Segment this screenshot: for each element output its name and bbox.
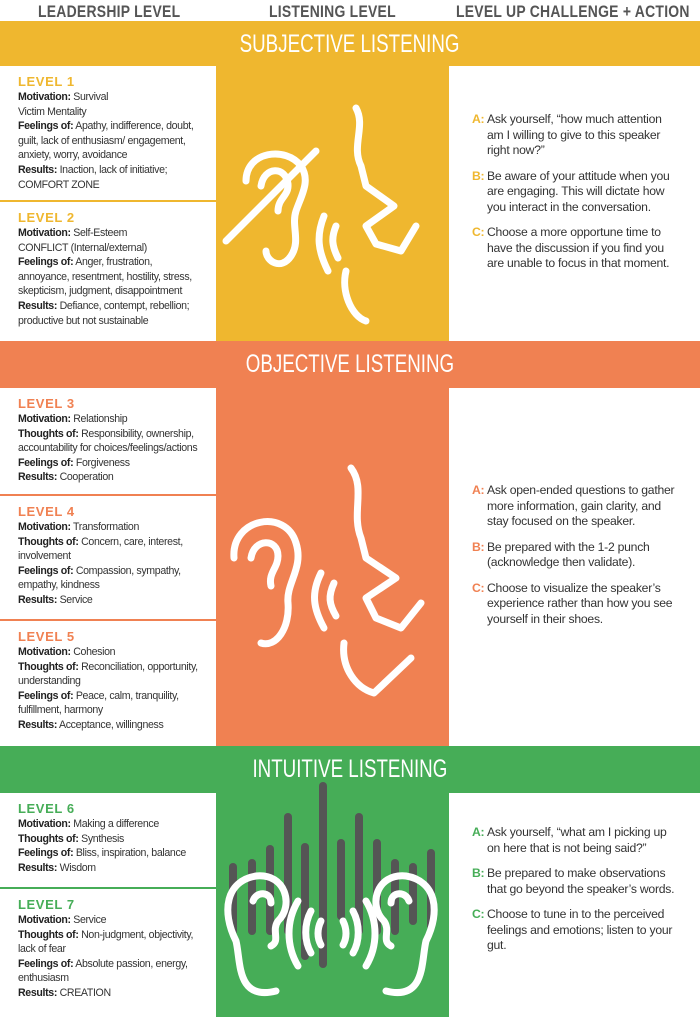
- level 6: Motivation: Making a difference: [18, 818, 159, 830]
- panel: objective listening: [0, 341, 700, 746]
- level 6: Results: Wisdom: [18, 862, 96, 874]
- level 3: Motivation: Relationship: [18, 413, 127, 425]
- actions: intuitive: A:: [472, 825, 484, 839]
- level 3: Results: Cooperation: [18, 471, 113, 483]
- actions: objective: C:: [472, 580, 484, 594]
- column heading: leadership level: LEADERSHIP LEVEL: [38, 2, 180, 21]
- panel: intuitive listening: [0, 746, 700, 1017]
- actions: intuitive: C:: [472, 907, 484, 921]
- actions: objective: B:: [472, 540, 484, 554]
- level 2: LEVEL 2: [18, 210, 75, 225]
- level 5: Motivation: Cohesion: [18, 646, 115, 658]
- level 7: Thoughts of: Non-judgment, objectivity, lack of fear: [18, 929, 193, 955]
- panel: subjective listening: [0, 21, 700, 341]
- level 3: LEVEL 3: [18, 396, 75, 411]
- level 5: LEVEL 5: [18, 629, 75, 644]
- heading: subjective listening: SUBJECTIVE LISTENING: [240, 30, 460, 58]
- level 6: Thoughts of: Synthesis: [18, 833, 124, 845]
- level 3: [0, 388, 216, 495]
- level 7: [0, 889, 216, 1017]
- level 1: LEVEL 1: [18, 74, 75, 89]
- level 4: LEVEL 4: [18, 504, 75, 519]
- actions: subjective: Be aware of your attitude when you are engaging. This will dictate how you interact in the conversation.: [487, 168, 670, 214]
- actions: subjective: [472, 112, 670, 270]
- actions: intuitive: Be prepared to make observations that go beyond the speaker’s words.: [487, 866, 674, 896]
- level 5: Results: Acceptance, willingness: [18, 719, 163, 731]
- level 2: [0, 202, 216, 341]
- level 6: Feelings of: Bliss, inspiration, balance: [18, 847, 186, 859]
- level 4: Results: Service: [18, 594, 92, 606]
- actions: objective: A:: [472, 483, 484, 497]
- icon: two ears with sound wave bars: [224, 782, 438, 996]
- icon: ear and speaking face: [230, 464, 424, 696]
- level 3: Feelings of: Forgiveness: [18, 457, 130, 469]
- level 7: Feelings of: Absolute passion, energy, enthusiasm: [18, 958, 188, 984]
- actions: intuitive: Choose to tune in to the perceived feelings and emotions; listen to your gut.: [487, 907, 672, 952]
- actions: objective: Ask open-ended questions to gather more information, gain clarity, and stay focused on the speaker.: [487, 483, 674, 528]
- column heading: listening level: LISTENING LEVEL: [269, 2, 396, 21]
- level 6: LEVEL 6: [18, 801, 75, 816]
- heading: intuitive listening: INTUITIVE LISTENING: [253, 755, 447, 783]
- level 1: Motivation: Survival: [18, 91, 108, 103]
- level 1: Feelings of: Apathy, indifference, doubt, guilt, lack of enthusiasm/ engagement, anxiety, worry, avoidance: [18, 120, 193, 161]
- actions: subjective: Choose a more opportune time to have the discussion if you find you are unable to focus in that moment.: [487, 225, 669, 270]
- level 4: Feelings of: Compassion, sympathy, empathy, kindness: [18, 565, 181, 591]
- actions: objective: Be prepared with the 1-2 punch (acknowledge then validate).: [487, 540, 650, 569]
- column heading: level up challenge: LEVEL UP CHALLENGE + ACTION: [456, 2, 690, 21]
- level 6: [0, 793, 216, 888]
- level 7: LEVEL 7: [18, 897, 75, 912]
- actions: objective: [472, 483, 674, 626]
- level 5: [0, 621, 216, 746]
- actions: subjective: C:: [472, 225, 484, 239]
- level 1: Victim Mentality: [18, 106, 86, 118]
- level 5: Thoughts of: Reconciliation, opportunity, understanding: [18, 661, 198, 687]
- level 4: Thoughts of: Concern, care, interest, involvement: [18, 536, 183, 562]
- level 3: Thoughts of: Responsibility, ownership, accountability for choices/feelings/actions: [18, 428, 197, 454]
- actions: subjective: Ask yourself, “how much attention am I willing to give to this speaker right now?”: [487, 112, 662, 157]
- level 2: Feelings of: Anger, frustration, annoyance, resentment, hostility, stress, skepticism, judgment, disappointment: [18, 256, 192, 297]
- icon: blocked ear and speaking face: [222, 104, 420, 324]
- level 5: Feelings of: Peace, calm, tranquility, fulfillment, harmony: [18, 690, 179, 716]
- level 2: Motivation: Self-Esteem: [18, 227, 127, 239]
- right white panels: [449, 66, 700, 341]
- actions: subjective: A:: [472, 112, 484, 126]
- level 4: Motivation: Transformation: [18, 521, 139, 533]
- level 2: CONFLICT (Internal/external): [18, 242, 147, 254]
- level 2: Results: Defiance, contempt, rebellion; productive but not sustainable: [18, 300, 189, 327]
- actions: objective: Choose to visualize the speaker’s experience rather than how you see yourself in their shoes.: [487, 580, 672, 626]
- actions: intuitive: [472, 825, 674, 952]
- level 1: [0, 66, 216, 201]
- level 1: Results: Inaction, lack of initiative; COMFORT ZONE: [18, 164, 167, 191]
- level 7: Results: CREATION: [18, 987, 111, 999]
- heading: objective listening: OBJECTIVE LISTENING: [246, 350, 454, 378]
- level 7: Motivation: Service: [18, 914, 106, 926]
- actions: intuitive: B:: [472, 866, 484, 880]
- level 4: [0, 496, 216, 620]
- actions: intuitive: Ask yourself, “what am I picking up on here that is not being said?”: [487, 825, 667, 854]
- actions: subjective: B:: [472, 168, 484, 182]
